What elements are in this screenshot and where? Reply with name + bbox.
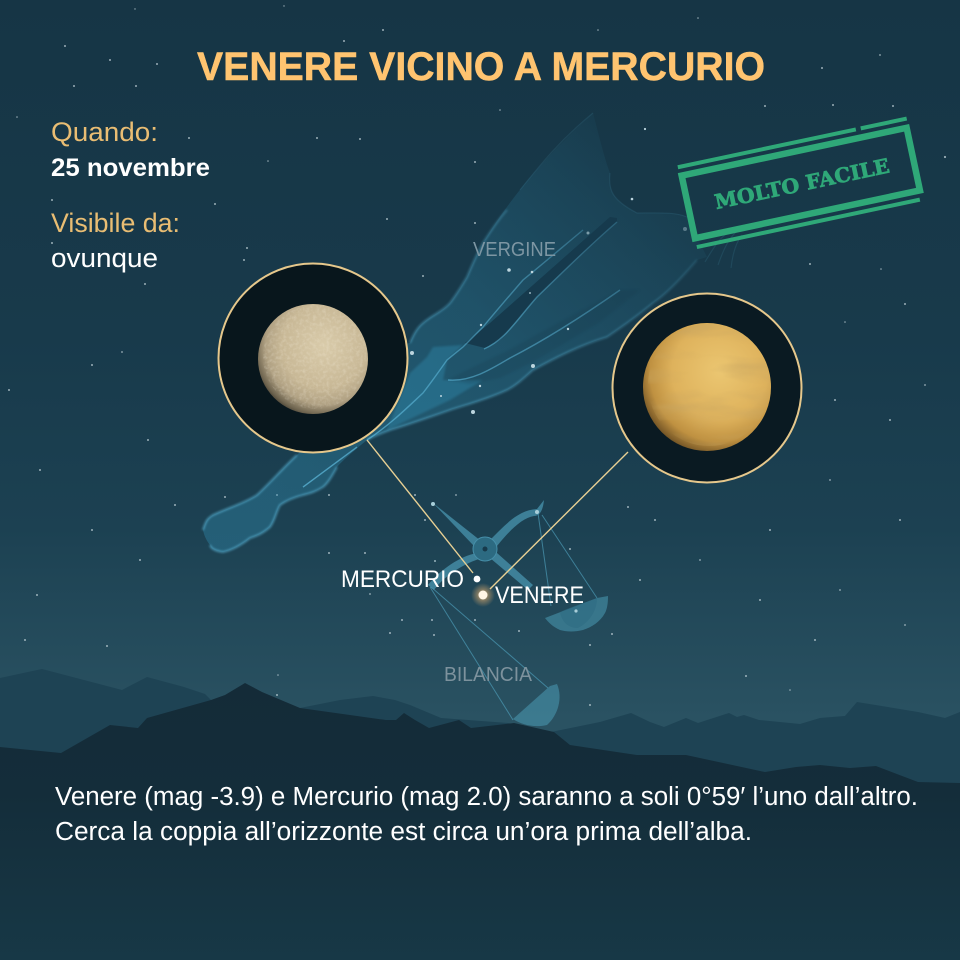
label: Visibile da: Visibile da: <box>51 208 180 238</box>
marker: Mercurio <box>474 576 480 582</box>
description text: Venere (mag -3.9) e Mercurio (mag 2.0) saranno a soli 0°59′ l’uno dall’altro. <box>55 783 918 811</box>
planet label: Venere: VENERE <box>495 582 584 609</box>
inner leg tone <box>448 290 640 384</box>
scale pivot <box>473 537 497 561</box>
stamp rule bottom <box>696 198 920 249</box>
location: ovunque <box>51 243 158 273</box>
bright inner glow at the crotch <box>387 345 483 430</box>
stamp frame <box>682 128 920 238</box>
leader line: Venere <box>490 452 628 589</box>
planet label: Mercurio: MERCURIO <box>341 566 464 593</box>
strings <box>430 513 597 720</box>
title: VENERE VICINO A MERCURIO <box>197 45 765 89</box>
constellation label: Vergine: VERGINE <box>473 239 556 261</box>
lower pan <box>513 684 560 726</box>
date: 25 novembre <box>51 154 210 182</box>
description text: Cerca la coppia all’orizzonte est circa un’ora prima dell’alba. <box>55 818 752 846</box>
stars <box>8 5 946 718</box>
constellation label: Bilancia: BILANCIA <box>444 664 533 686</box>
stars over Vergine <box>410 128 687 562</box>
description text <box>55 783 918 846</box>
dark gap between the legs <box>465 217 617 348</box>
stamp: molto facile <box>677 117 924 249</box>
inset: Mercurio planet <box>218 264 408 452</box>
central leg lines <box>303 222 620 487</box>
right pan <box>545 596 608 632</box>
info: visibility <box>51 208 180 273</box>
faint hand near stamp <box>705 232 742 268</box>
mountains: front ridge <box>0 683 960 960</box>
leader line: Mercurio <box>367 440 473 573</box>
inset: Venere planet <box>612 294 802 482</box>
stamp rule top <box>677 117 907 169</box>
scale beam <box>428 500 544 590</box>
info: when <box>51 117 210 182</box>
mountains: back ridge <box>0 669 960 800</box>
label: Quando: Quando: <box>51 117 158 147</box>
marker: Venere <box>471 583 495 607</box>
constellation: Bilancia <box>428 500 608 726</box>
constellation: Vergine <box>203 113 742 552</box>
contour lines <box>203 210 697 552</box>
stamp text: MOLTO FACILE <box>712 154 892 214</box>
faint arm outline <box>520 113 687 217</box>
body and legs <box>203 113 707 552</box>
